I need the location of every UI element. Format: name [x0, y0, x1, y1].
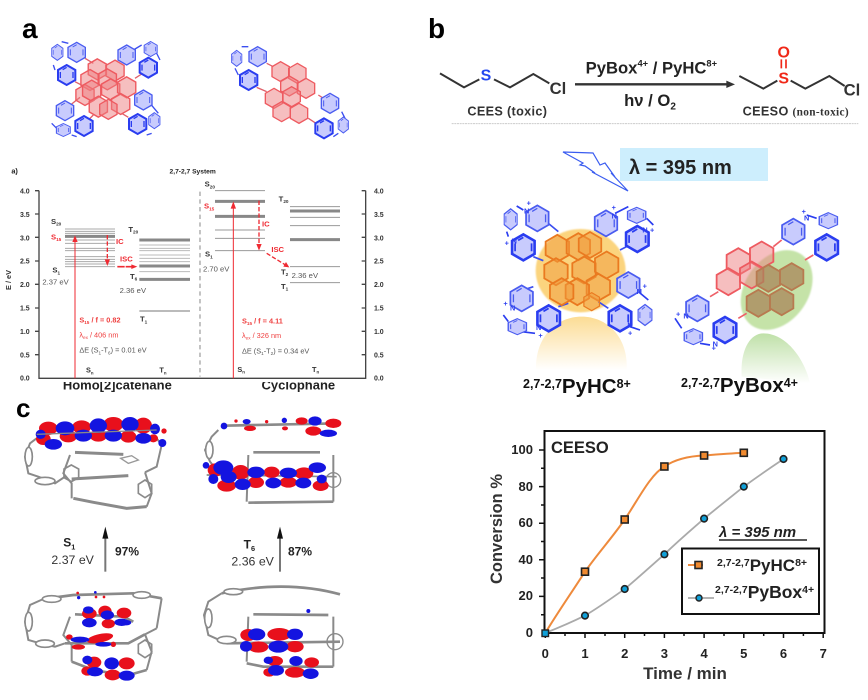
axis titles: Conversion % [488, 474, 506, 584]
transition arrow T6: 6 [251, 544, 255, 553]
reaction arrow and conditions: PyBox [586, 58, 637, 77]
y axis tick labels: 0.0 [374, 376, 384, 383]
state labels: 20 [56, 222, 62, 227]
reaction arrow and conditions [575, 58, 735, 112]
y axis tick labels: 3.0 [20, 235, 30, 242]
pyrene core [544, 232, 618, 311]
x axis labels [542, 646, 827, 661]
levels cyclophane [215, 191, 340, 283]
y axis labels: 100 [511, 442, 533, 457]
state labels: n [316, 370, 319, 375]
state labels: T [159, 366, 164, 375]
charge labels: + [527, 198, 531, 207]
x axis labels: 2 [621, 646, 628, 661]
charge labels: + [802, 207, 806, 216]
state labels: 15 [56, 237, 62, 242]
CEES structure [440, 68, 566, 118]
state labels: / f = 0.82 [89, 315, 121, 324]
reaction arrow and conditions: hν / O [624, 91, 670, 110]
state labels: 15 [84, 320, 90, 325]
axis ticks [539, 450, 823, 638]
x axis labels: 3 [661, 646, 668, 661]
state labels: 1 [145, 319, 148, 324]
molecule: PyBox4+ [675, 207, 838, 383]
state labels: / f = 4.11 [252, 316, 283, 325]
charge labels: N [510, 304, 515, 313]
state labels: ISC [120, 255, 133, 264]
x axis labels: 5 [740, 646, 747, 661]
y axis tick labels: 0.0 [20, 376, 30, 383]
charge labels: + [712, 344, 716, 353]
y axis tick labels: 4.0 [20, 188, 30, 195]
pyrene core [717, 241, 803, 317]
transition arrow S1: 1 [71, 542, 75, 551]
state labels: 2.70 eV [203, 264, 230, 273]
state labels: 1 [57, 270, 60, 275]
cage: T6 lower orbital [204, 587, 343, 679]
y axis tick labels: 2.5 [20, 259, 30, 266]
x axis labels: 1 [581, 646, 589, 661]
state labels: IC [262, 220, 270, 229]
state labels: ISC [271, 245, 285, 254]
state labels: / 406 nm [88, 330, 118, 339]
reaction arrow and conditions: 4+ [637, 59, 649, 69]
plot frame [544, 431, 824, 633]
diagram labels: 2,7-2,7 System [170, 168, 216, 175]
y axis labels: 80 [519, 479, 533, 494]
y axis tick labels: 1.0 [20, 329, 30, 336]
state labels: 15 [247, 321, 252, 326]
state labels: 1 [210, 254, 213, 259]
wavelength note: λ = 395 nm [718, 524, 796, 541]
y axis labels: 20 [519, 588, 533, 603]
transition arrow S1: S [63, 536, 71, 550]
charge labels [676, 207, 809, 353]
state labels: 20 [283, 199, 289, 204]
panel label a: a [22, 13, 38, 44]
axis titles [488, 474, 727, 683]
series title: CEESO [551, 439, 609, 457]
charge labels: + [650, 226, 654, 235]
y axis tick labels: 0.5 [20, 352, 30, 359]
state labels: 2.36 eV [120, 286, 147, 295]
label: PyHC8+: PyHC [562, 375, 617, 398]
diagram labels: Cyclophane [262, 377, 335, 392]
state labels: S [51, 232, 56, 241]
state labels: ΔE (S [79, 346, 98, 355]
state labels: n [91, 370, 94, 375]
state labels: 2 [271, 351, 274, 356]
state labels: T [130, 272, 135, 281]
label: PyHC8+: 2,7-2,7 [523, 377, 562, 391]
state labels: 1 [98, 350, 101, 355]
y axis tick labels: 1.5 [374, 306, 384, 313]
reaction arrow and conditions: / PyHC [648, 58, 706, 77]
CEESO structure [739, 44, 860, 119]
state labels: T [279, 194, 283, 203]
x axis labels: 7 [820, 646, 827, 661]
label: PyBox4+: 2,7-2,7 [681, 376, 720, 390]
series PyHC8+ [542, 449, 747, 636]
y axis labels: 40 [519, 552, 533, 567]
series PyBox4+ [545, 456, 787, 633]
molecule: PyHC8+ [503, 198, 654, 370]
state labels: ) = 0.01 eV [111, 346, 147, 355]
charge labels: + [643, 282, 647, 291]
pyridinium rings [503, 205, 653, 335]
diagram labels: Homo[2]catenane [63, 377, 172, 392]
molecule: cyclophane structure [231, 47, 349, 138]
CEES structure: CEES (toxic) [467, 104, 547, 118]
icon: lightning bolt [563, 152, 628, 191]
cage: S1 upper orbital [25, 417, 167, 508]
state labels: S [205, 250, 210, 259]
legend [682, 548, 819, 614]
transition arrow T6: 87% [288, 545, 312, 559]
label: PyBox4+: PyBox [720, 374, 784, 397]
diagram labels: E / eV [4, 270, 13, 290]
state labels: 20 [133, 230, 139, 235]
y axis tick labels: 3.5 [20, 212, 30, 219]
state labels: ex [246, 336, 251, 341]
CEESO structure: Cl [844, 80, 860, 99]
legend: PyBox [748, 582, 802, 602]
charge labels: N [627, 320, 633, 329]
state labels: S [204, 202, 209, 211]
y axis tick labels: 1.5 [20, 306, 30, 313]
state labels: 2.37 eV [42, 278, 70, 287]
y axis labels: 0 [526, 625, 533, 640]
x axis labels: 0 [542, 646, 549, 661]
transition arrow S1: 97% [115, 545, 139, 559]
reaction arrow and conditions: 2 [670, 101, 676, 112]
axes [35, 191, 366, 378]
state labels: S [51, 217, 56, 226]
state labels: T [312, 365, 316, 374]
state labels: T [281, 267, 286, 276]
state labels: 2 [286, 272, 289, 277]
state labels: -T [264, 346, 271, 355]
y axis tick labels: 3.0 [374, 235, 384, 242]
cage: S1 lower orbital [25, 591, 162, 681]
cage: T6 upper orbital [203, 416, 341, 503]
CEES structure: Cl [550, 79, 566, 98]
charge labels [503, 198, 654, 340]
state labels: ) = 0.34 eV [273, 346, 309, 355]
state labels: 20 [210, 184, 215, 189]
axis titles: Time / min [643, 664, 727, 683]
y axis tick labels: 1.0 [374, 329, 384, 336]
y axis tick labels: 0.5 [374, 352, 384, 359]
state labels: S [242, 316, 247, 325]
CEESO structure: CEESO (non-toxic) [743, 105, 849, 119]
legend: 2,7-2,7 [717, 557, 750, 569]
pyridinium rings [675, 213, 838, 345]
chart: conversion vs time [488, 431, 827, 683]
label: PyHC8+: 8+ [617, 377, 631, 391]
chart: energy level diagram [4, 166, 384, 392]
legend: PyHC [750, 556, 795, 575]
singlet levels homo[2]catenane [65, 229, 115, 267]
state labels: T [140, 315, 145, 324]
state labels: ex [83, 335, 89, 340]
x axis labels: 6 [780, 646, 787, 661]
state labels: T [281, 282, 286, 291]
green glow [726, 236, 827, 344]
state labels: λ [79, 330, 83, 339]
thick level bands [65, 236, 190, 279]
state labels: λ [242, 331, 246, 340]
state labels: 15 [209, 206, 215, 211]
x axis labels: 4 [700, 646, 708, 661]
legend: 4+ [802, 584, 814, 596]
state labels: 6 [135, 277, 138, 282]
transition arrow T6: 2.36 eV [231, 555, 275, 569]
panel label b: b [428, 13, 445, 44]
legend: 2,7-2,7 [715, 584, 748, 596]
state labels: ΔE (S [242, 346, 261, 355]
wavelength banner: λ = 395 nm [629, 157, 732, 179]
charge labels: N [713, 340, 718, 349]
CEESO structure: O [777, 44, 790, 61]
state labels [42, 180, 319, 375]
y axis tick labels: 4.0 [374, 188, 384, 195]
state labels: S [52, 266, 57, 275]
state labels: S [237, 365, 242, 374]
charge labels: N [804, 214, 809, 223]
label: PyBox4+: 4+ [784, 376, 798, 390]
wavelength banner [620, 148, 768, 181]
transition arrow T6 [231, 527, 312, 572]
charge labels: + [628, 328, 632, 337]
charge labels: N [536, 323, 541, 332]
charge labels: + [503, 299, 508, 308]
reaction scheme [440, 44, 860, 124]
charge labels: + [538, 331, 543, 340]
charge labels: N [612, 211, 617, 220]
glow reflection [741, 333, 810, 383]
CEESO structure: S [778, 70, 789, 87]
y axis tick labels: 3.5 [374, 212, 384, 219]
state labels: T [128, 225, 133, 234]
charge labels: N [642, 226, 648, 235]
diagram labels: a) [11, 166, 18, 175]
excitation and transfer arrows [72, 201, 289, 378]
transition arrow S1 [51, 527, 139, 572]
y axis tick labels: 2.5 [374, 259, 384, 266]
state labels: / 326 nm [251, 331, 281, 340]
transition arrow T6: T [244, 537, 251, 551]
state labels: n [164, 370, 167, 375]
charge labels: N [512, 236, 517, 245]
charge labels: + [505, 238, 509, 247]
state labels: IC [116, 237, 124, 246]
panel label c: c [16, 393, 30, 423]
charge labels: N [683, 311, 689, 320]
orange glow [536, 229, 626, 312]
state labels: 6 [108, 350, 111, 355]
state labels: 1 [286, 287, 289, 292]
state labels: S [86, 366, 91, 375]
state labels: 2.36 eV [292, 271, 319, 280]
triplet levels homo[2]catenane [139, 245, 190, 272]
charge labels: + [676, 310, 680, 319]
charge labels: N [637, 287, 642, 296]
transition arrow S1: 2.37 eV [51, 553, 95, 567]
y axis tick labels: 2.0 [374, 282, 384, 289]
state labels: n [242, 370, 245, 375]
legend: 8+ [795, 557, 807, 569]
state labels: S [79, 315, 84, 324]
molecule: homo[2]catenane structure [52, 41, 160, 137]
y axis labels [511, 442, 533, 640]
diagram labels [4, 166, 350, 392]
glow reflection [536, 317, 627, 370]
CEES structure: S [481, 68, 492, 85]
charge labels: N [524, 206, 529, 215]
y axis labels: 60 [519, 515, 533, 530]
state labels: 1 [261, 351, 264, 356]
y axis tick labels: 2.0 [20, 282, 30, 289]
y axis tick labels [20, 188, 384, 383]
state labels: -T [101, 346, 109, 355]
orbital panel [25, 416, 343, 681]
state labels: S [205, 180, 210, 189]
charge labels: + [612, 203, 616, 212]
reaction arrow and conditions: 8+ [706, 59, 718, 69]
